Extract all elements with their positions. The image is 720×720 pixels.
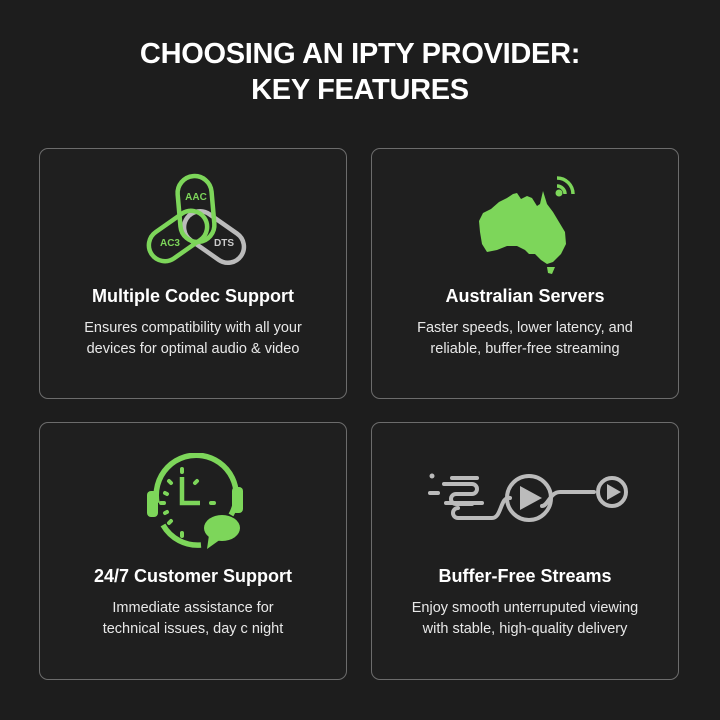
- text: [84, 320, 302, 357]
- text: devices for optimal audio & video: [87, 341, 299, 357]
- text: Faster speeds, lower latency, and: [417, 320, 633, 336]
- icon: codec chain: [146, 174, 246, 265]
- panel: codec: [39, 148, 347, 399]
- icon: codec chain: AAC: [185, 192, 207, 203]
- title: [140, 38, 580, 106]
- icon: australia map: [479, 176, 575, 274]
- heading: 24/7 Customer Support: [94, 566, 292, 586]
- panel: servers: [371, 148, 679, 399]
- heading: Buffer-Free Streams: [438, 566, 612, 586]
- text: reliable, buffer-free streaming: [430, 341, 620, 357]
- icon: codec chain: DTS: [214, 238, 234, 249]
- heading: Australian Servers: [445, 286, 605, 306]
- heading: Multiple Codec Support: [92, 286, 294, 306]
- text: [417, 320, 633, 357]
- panel: buffer-free: [371, 422, 679, 680]
- icon: clock headset: [147, 453, 243, 549]
- icon: codec chain: AC3: [160, 238, 180, 249]
- text: Immediate assistance for: [112, 600, 274, 616]
- title: KEY FEATURES: [251, 74, 469, 106]
- panel: support: [39, 422, 347, 680]
- title: CHOOSING AN IPTY PROVIDER:: [140, 38, 580, 70]
- icon: stream play: [428, 474, 628, 522]
- text: with stable, high-quality delivery: [423, 621, 627, 637]
- text: Enjoy smooth unterruputed viewing: [412, 600, 638, 616]
- text: [412, 600, 638, 637]
- text: [102, 600, 284, 637]
- text: Ensures compatibility with all your: [84, 320, 302, 336]
- text: technical issues, day c night: [103, 621, 283, 637]
